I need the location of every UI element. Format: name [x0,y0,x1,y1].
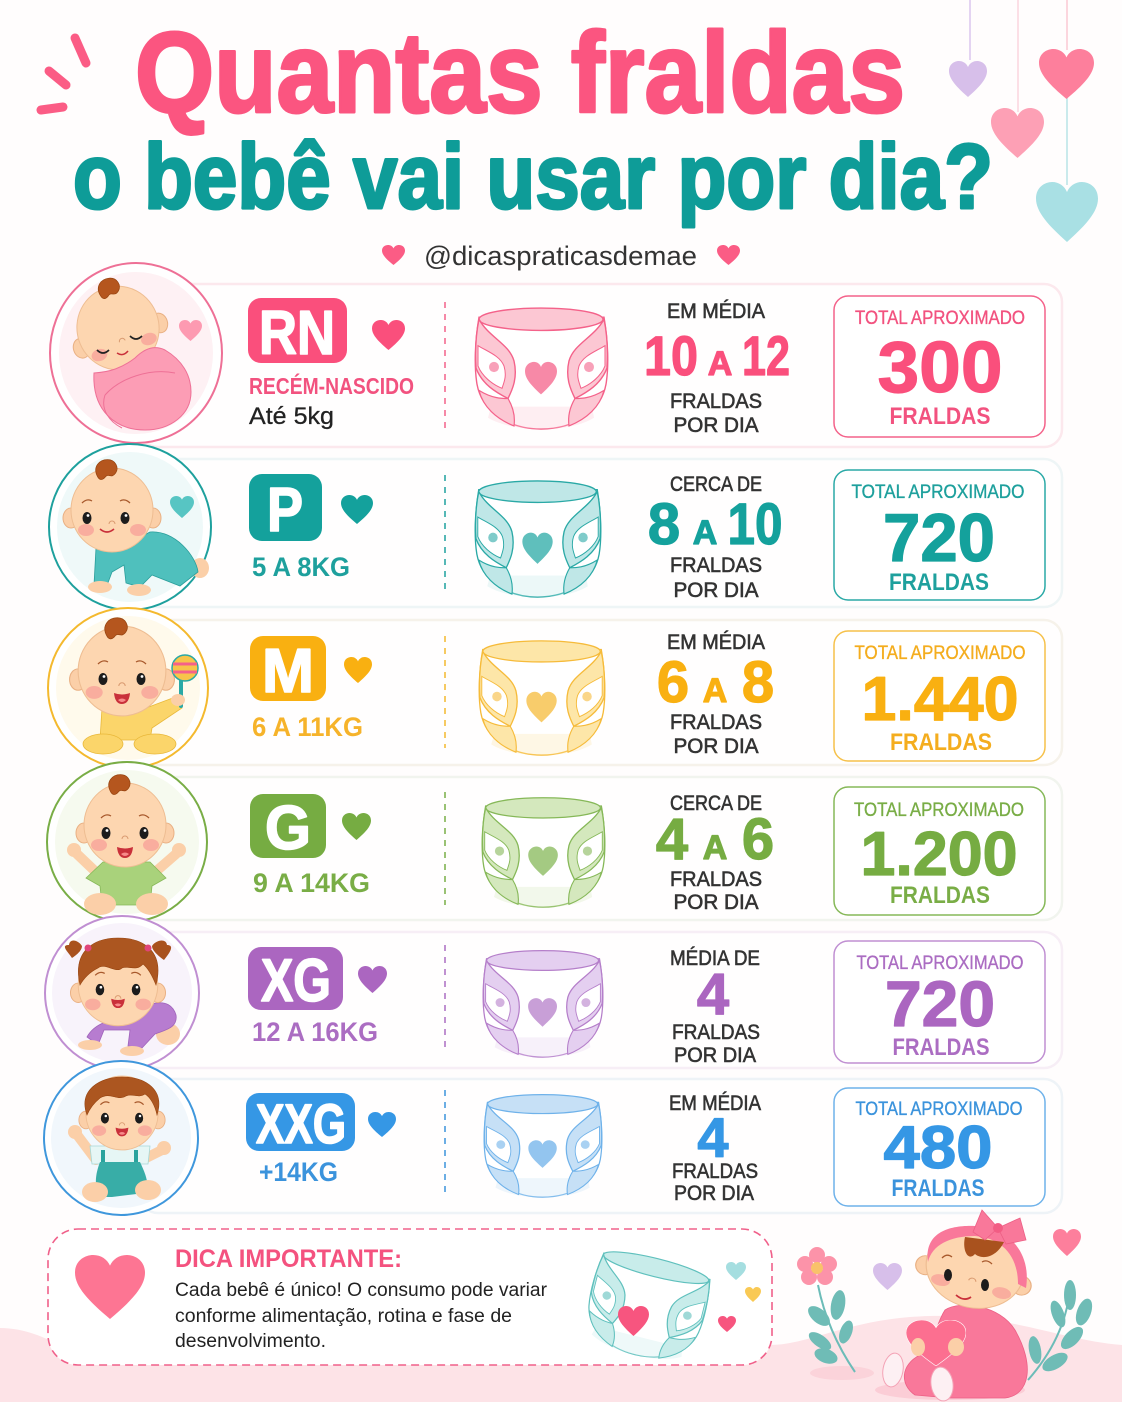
tip text: desenvolvimento. [175,1331,326,1352]
daily count: 6 [742,807,774,872]
total box: FRALDAS [892,1175,984,1202]
card [140,284,1062,447]
daily count: FRALDAS [670,390,762,413]
badge G: G [265,794,311,863]
heart [372,320,405,350]
daily count: POR DIA [674,414,758,437]
heart [368,1112,396,1137]
heart [358,966,387,993]
tip text: Cada bebê é único! O consumo pode variar [175,1280,548,1301]
daily count: POR DIA [674,579,758,602]
row: RN [50,263,1062,447]
card [140,459,1062,607]
baby girl crawling [45,916,199,1070]
daily count: POR DIA [674,735,758,758]
daily count: A [703,829,727,867]
total box: TOTAL APROXIMADO [854,799,1024,821]
plant right [1027,1280,1095,1380]
daily count: 4 [697,962,729,1027]
daily count [648,473,782,602]
total box: TOTAL APROXIMADO [856,952,1024,974]
size label: RECÉM-NASCIDO [249,372,414,399]
daily count: FRALDAS [672,1021,760,1044]
tip heading: DICA IMPORTANTE: [175,1245,402,1273]
daily count: FRALDAS [670,554,762,577]
tip diaper [579,1245,715,1369]
badge P: P [267,476,303,545]
badge M: M [262,637,314,706]
card [140,620,1062,765]
badge P [249,474,322,545]
daily count: CERCA DE [670,473,762,496]
tip panel [48,1229,772,1369]
card [140,777,1062,920]
total box: 1.440 [862,665,1018,734]
total box: TOTAL APROXIMADO [854,642,1026,664]
size label: 5 A 8KG [252,552,350,582]
floating hearts [873,1229,1081,1290]
size label: 6 A 11KG [252,712,363,742]
total box: FRALDAS [892,1034,990,1061]
daily count [656,792,774,914]
baby girl with heart [875,1210,1041,1402]
total box [834,941,1045,1063]
hanging hearts [949,0,1098,242]
daily count: 4 [656,807,688,872]
card [140,1079,1062,1213]
total box: FRALDAS [890,729,992,756]
title: o bebê vai usar por dia? [73,126,993,228]
daily count: POR DIA [674,891,758,914]
diaper [483,951,603,1057]
heart [341,495,373,524]
size label: 9 A 14KG [253,868,370,898]
row: M [48,608,1062,768]
total box: 1.200 [860,820,1018,889]
diaper [475,481,601,597]
size label: Até 5kg [249,403,334,430]
daily count: FRALDAS [672,1160,758,1183]
heart [342,813,371,840]
sparkle strokes [41,38,86,110]
total box: TOTAL APROXIMADO [856,1098,1022,1120]
baby crawling [49,444,211,610]
daily count: EM MÉDIA [667,631,765,654]
daily count: 10 [728,492,782,557]
badge XG: XG [261,947,331,1014]
row: XG [45,916,1062,1070]
daily count [657,631,774,758]
diaper [482,798,605,907]
daily count: EM MÉDIA [669,1092,761,1115]
daily count: 12 [742,324,790,387]
daily count [670,947,760,1067]
daily count: MÉDIA DE [670,947,760,970]
badge M [250,636,326,706]
total box: 720 [883,500,995,576]
baby with rattle [48,608,208,768]
daily count: 8 [742,650,774,715]
badge XXG: XXG [256,1092,346,1155]
heart [344,657,372,683]
baby in overalls [44,1061,198,1215]
badge RN: RN [259,299,335,368]
total box [834,470,1045,600]
badge G [250,794,326,863]
daily count [669,1092,761,1205]
daily count: CERCA DE [670,792,762,815]
total box: FRALDAS [890,403,990,430]
tip heart [75,1255,145,1319]
handle: @dicaspraticasdemae [424,241,697,271]
daily count: 4 [697,1106,729,1169]
daily count: EM MÉDIA [667,300,765,323]
diaper [475,308,608,429]
pink ground [0,1316,1122,1402]
total box: TOTAL APROXIMADO [852,481,1024,503]
total box: FRALDAS [889,569,989,596]
total box [834,631,1045,761]
total box [834,1088,1045,1206]
tip text [175,1280,548,1352]
daily count: POR DIA [674,1182,754,1205]
size label [249,372,414,430]
daily count: A [693,514,717,552]
row: G [47,762,1062,922]
total box: 300 [878,328,1002,408]
total box: FRALDAS [890,882,990,909]
baby sleeping [50,263,222,443]
row: XXG [44,1061,1062,1215]
daily count: FRALDAS [670,711,762,734]
daily count: 6 [657,650,689,715]
title [73,10,993,228]
card [140,932,1062,1068]
row: P [49,444,1062,610]
size label: +14KG [259,1157,338,1187]
total box [834,787,1045,915]
tip text: conforme alimentação, rotina e fase de [175,1306,512,1327]
total box [834,296,1045,437]
diaper [484,1095,602,1197]
total box: 720 [885,968,995,1040]
total box: 480 [884,1114,992,1181]
daily count: A [703,672,727,710]
total box: TOTAL APROXIMADO [855,307,1025,329]
daily count: 10 [644,324,698,387]
size label: 12 A 16KG [252,1017,378,1047]
title: Quantas fraldas [135,10,905,137]
diaper [479,641,605,755]
daily count: A [708,345,732,383]
daily count: FRALDAS [670,868,762,891]
flower left [797,1247,874,1380]
baby sitting arms up [47,762,207,922]
daily count: POR DIA [674,1044,756,1067]
daily count: 8 [648,492,680,557]
small hearts [718,1262,761,1332]
daily count [644,300,790,437]
